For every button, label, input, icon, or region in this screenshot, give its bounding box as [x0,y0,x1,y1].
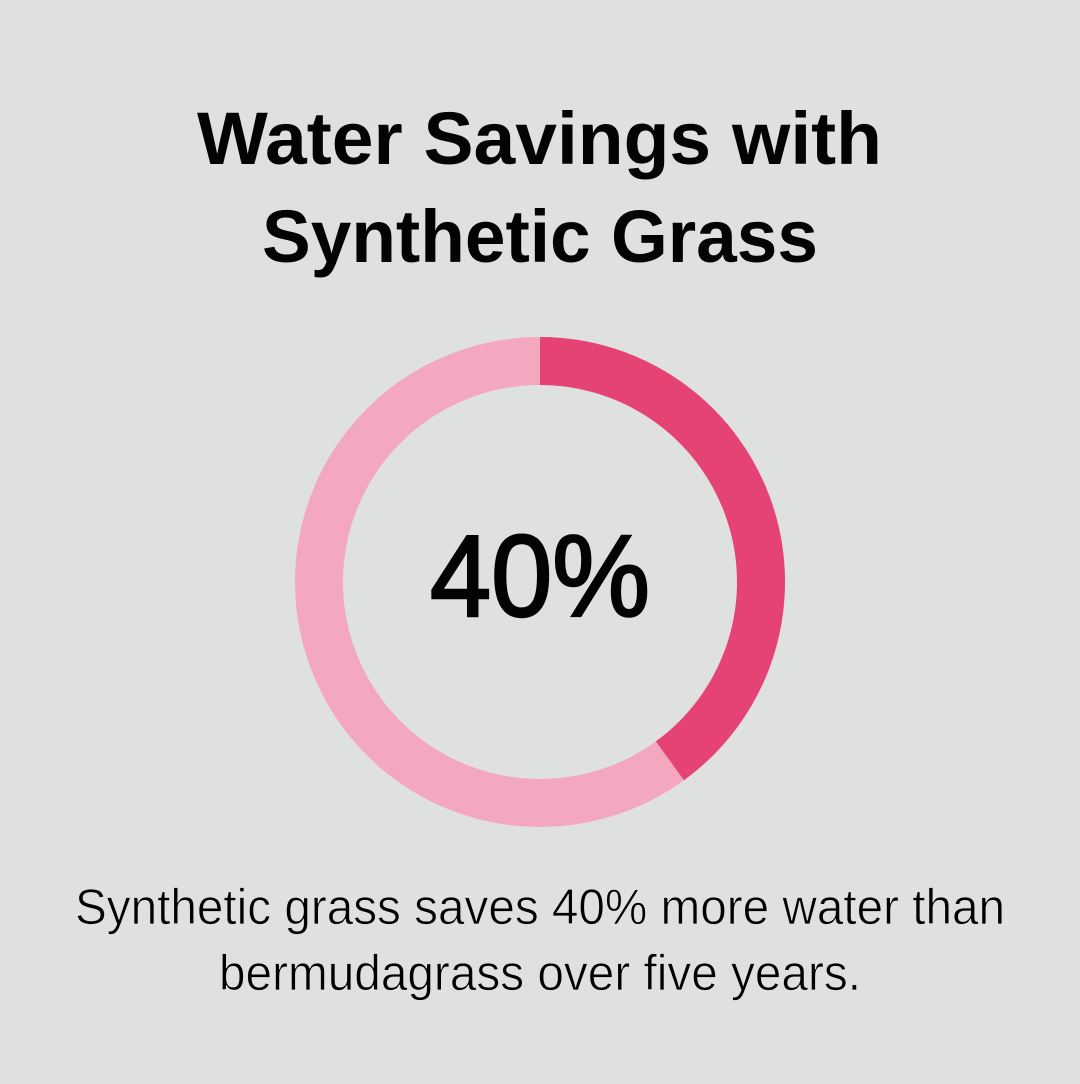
description text: bermudagrass over five years. [219,945,861,1001]
title: Synthetic Grass [262,195,818,278]
description text [75,879,1005,1001]
donut chart: 40 percent [319,361,761,803]
title: Water Savings with [197,97,882,180]
title [197,97,882,278]
description text: Synthetic grass saves 40% more water than [75,879,1005,935]
center value: 40% [430,511,650,641]
